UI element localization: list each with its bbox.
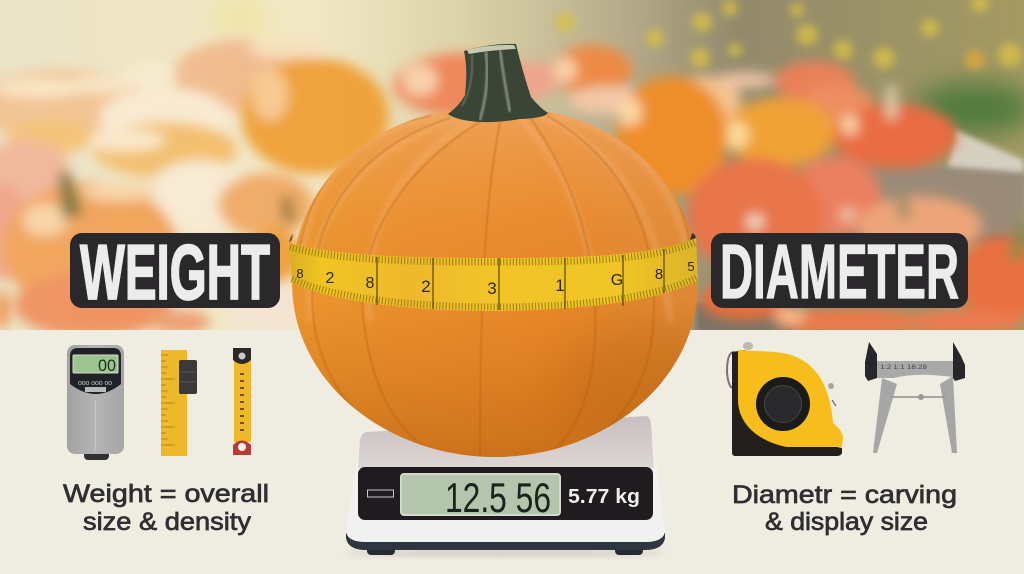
tape numbers: 3 [487,279,497,298]
caption: diameter: Diametr = carving [732,481,957,509]
scale feet [367,546,395,555]
tape tick marks [290,242,696,262]
heading: WEIGHT [70,228,280,316]
bottom panel [0,330,1024,574]
digital kitchen scale [345,416,665,557]
caption: weight [63,480,269,536]
icon: tape measure [727,342,843,456]
tape numbers: 2 [421,277,431,296]
icon: small gauge [233,348,251,455]
icon: caliper [865,342,965,453]
bokeh lights [555,0,1022,70]
measuring tape around pumpkin [289,233,698,311]
main pumpkin [292,44,698,457]
lcd [401,474,560,515]
crate [696,130,1024,333]
icon: digital weighing device: 000 000 00 [78,381,112,387]
scale body [346,416,665,542]
icon: ruler with clip [161,350,197,456]
caption: diameter [732,481,957,536]
icon: digital weighing device [67,345,124,460]
tape numbers: 8 [366,275,375,292]
tape numbers: 2 [326,270,335,287]
small label [368,490,394,497]
icon: digital weighing device: 00 [98,356,116,375]
lcd reading: 12.5 56 [445,474,551,521]
stem [448,44,548,122]
back pumpkins [0,38,1024,338]
lower right shading [570,320,691,434]
tape numbers: G [611,272,623,289]
background photo: pumpkin patch [0,0,1024,338]
pumpkin ribs [296,112,694,456]
tape numbers [296,259,695,298]
tape numbers: 1 [555,276,565,295]
tape numbers: 8 [655,266,663,283]
heading: WEIGHT: WEIGHT [80,228,270,316]
caption: weight: size & density [83,508,252,536]
green field [210,2,1024,134]
tape numbers: 8 [296,266,304,281]
weight reading: 5.77 kg [568,486,640,508]
scale base [346,533,665,550]
scale display panel [358,467,653,520]
icon: caliper: 1:2 1:1 16:28 [880,365,928,371]
caption: diameter: & display size [765,508,928,536]
tape numbers: 5 [687,259,695,274]
caption: weight: Weight = overall [63,480,269,508]
